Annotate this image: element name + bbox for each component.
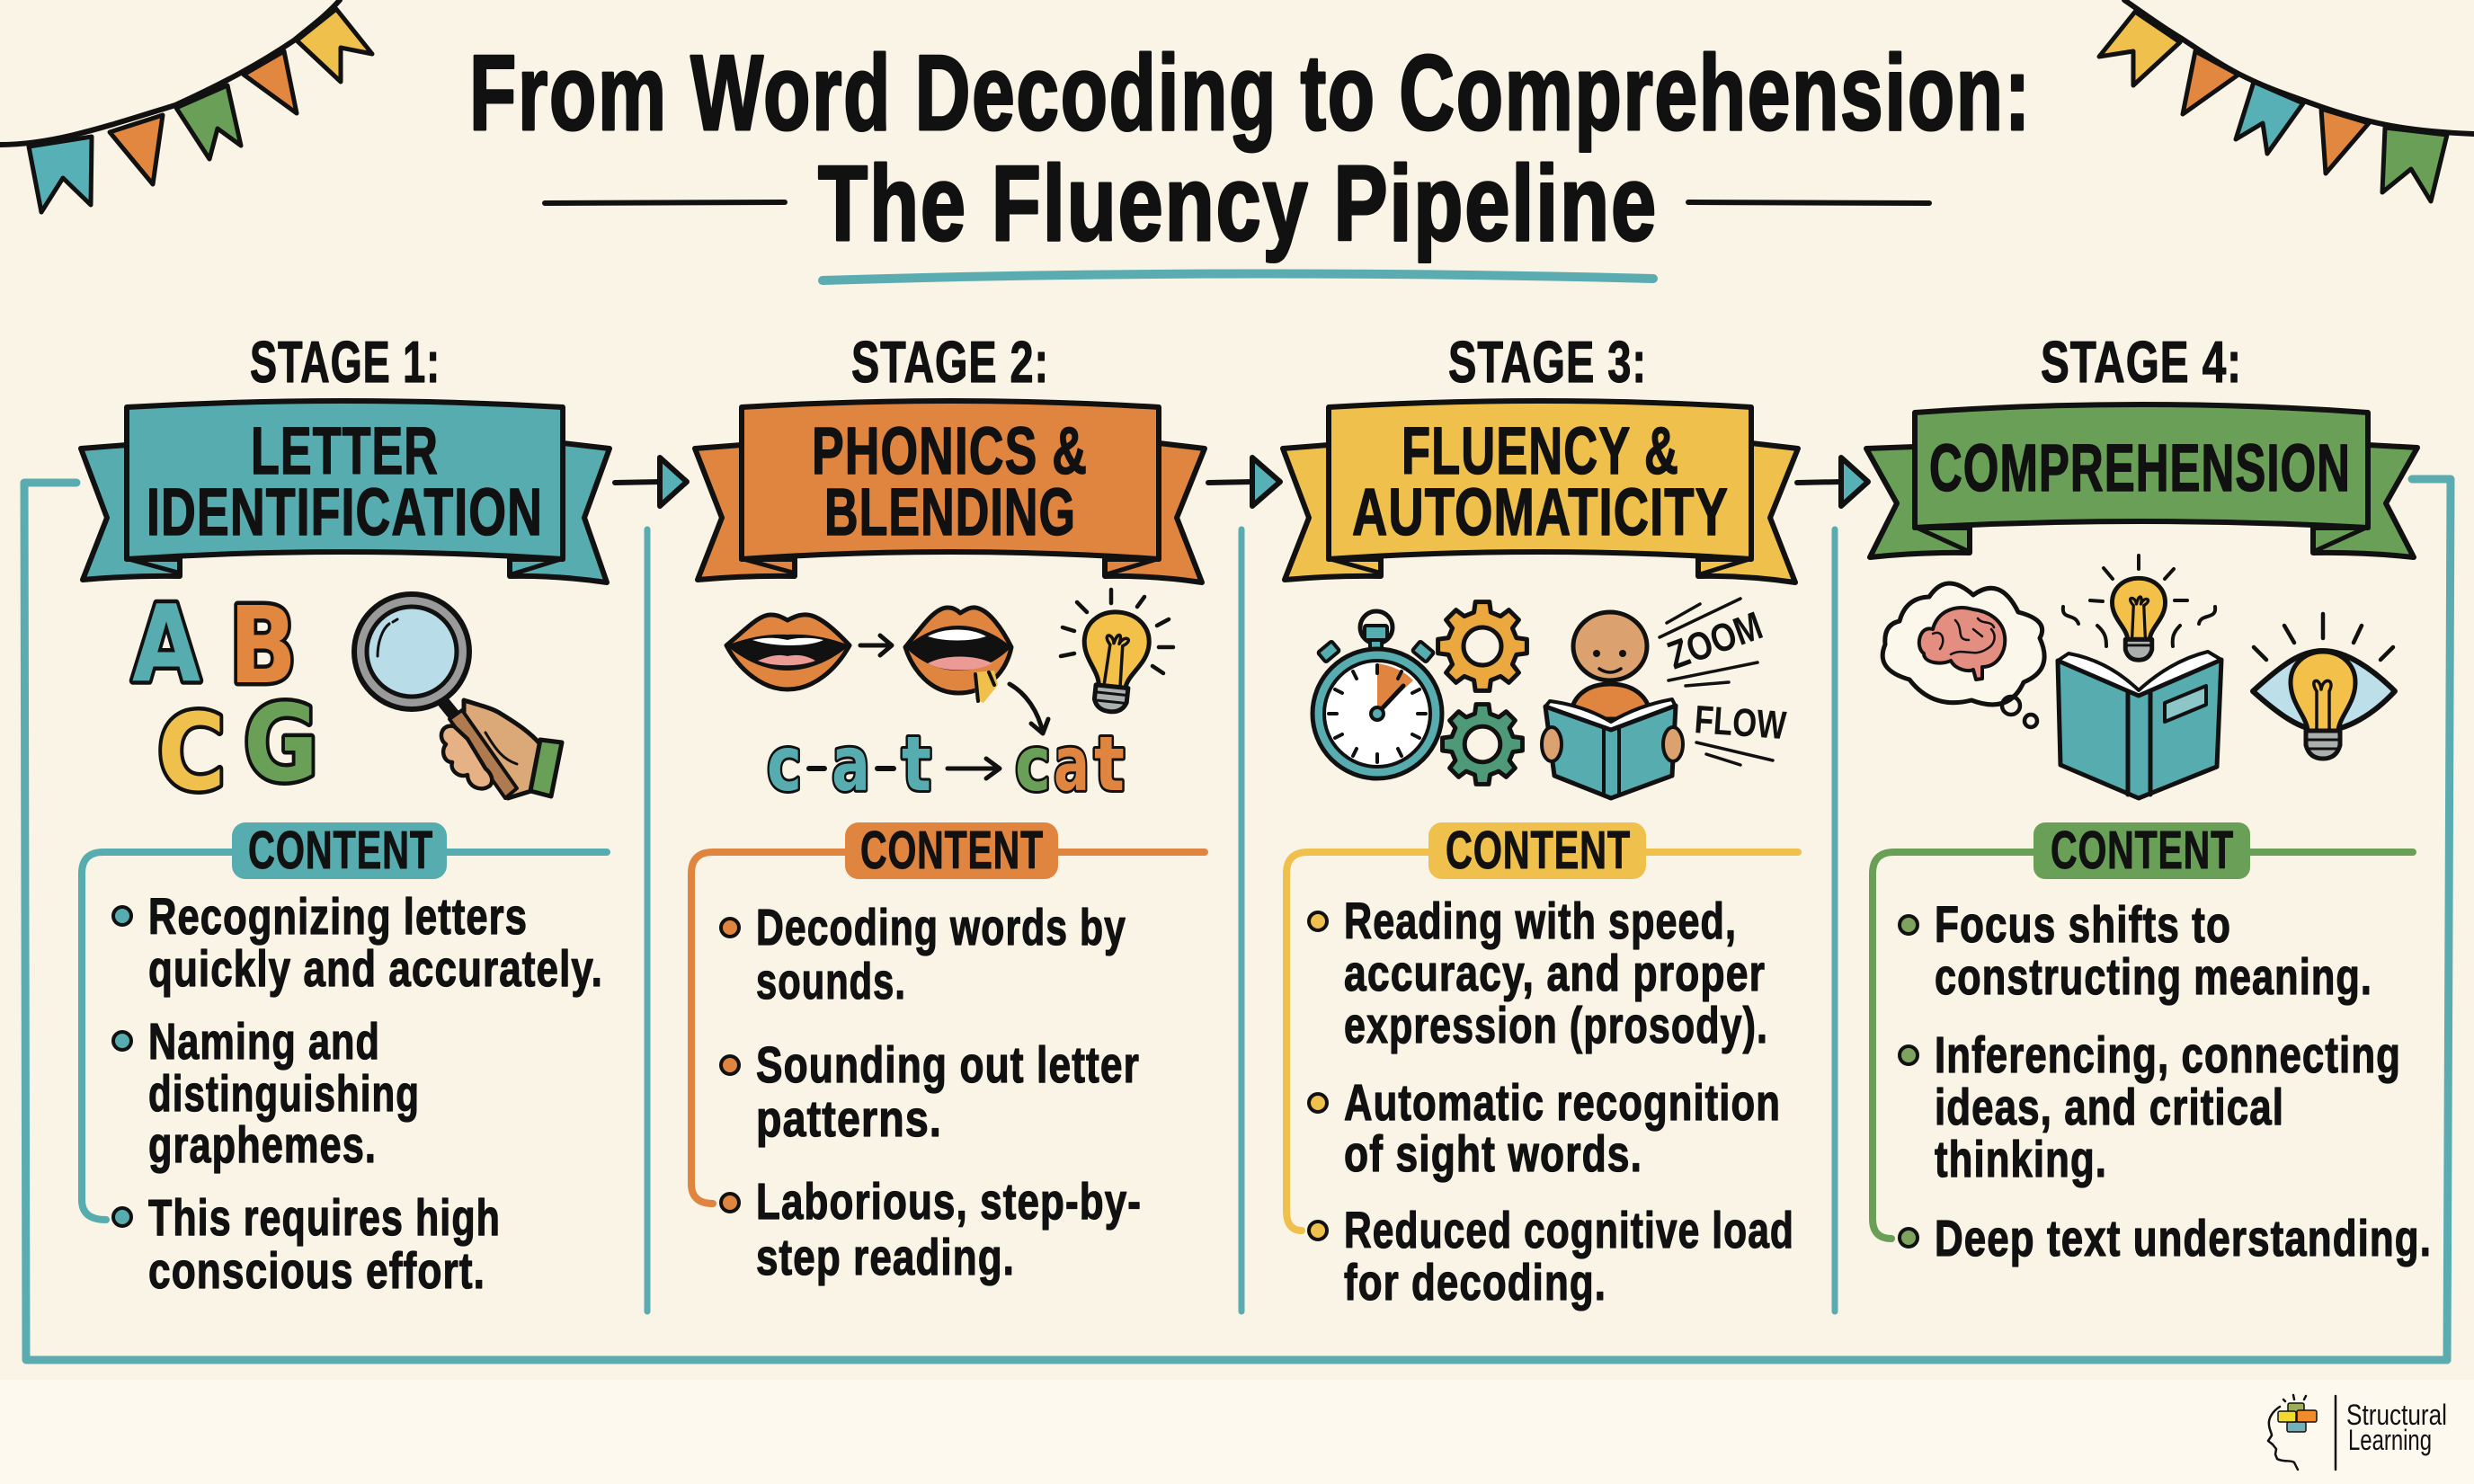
stage divider 2 bbox=[1239, 529, 1244, 1311]
content section bbox=[691, 821, 1205, 1285]
panel: stage 3 bbox=[1283, 329, 1798, 1311]
bullets list: step reading. bbox=[756, 1229, 1015, 1285]
logo: Structural Learning bbox=[2268, 1395, 2447, 1470]
stage 3 label: STAGE 3: bbox=[1448, 329, 1647, 395]
bullets list: Recognizing letters bbox=[148, 888, 528, 945]
stage 1 ribbon banner: IDENTIFICATION bbox=[147, 475, 543, 549]
arrow: stage 2 to 3 bbox=[1208, 458, 1280, 506]
stage 2 label: STAGE 2: bbox=[851, 329, 1049, 395]
content tag: CONTENT bbox=[2051, 821, 2234, 880]
word blend: c-a-t to cat: t bbox=[902, 720, 931, 808]
icon: light bulb bbox=[1061, 590, 1173, 715]
bullets list: ideas, and critical bbox=[1935, 1079, 2284, 1135]
content section bbox=[1873, 821, 2432, 1266]
icon: magnifying glass in hand bbox=[354, 594, 562, 798]
bullets list bbox=[721, 899, 1142, 1285]
stage divider 1 bbox=[644, 529, 651, 1311]
zoom label: ZOOM bbox=[1662, 603, 1768, 678]
arrow: stage 3 to 4 bbox=[1797, 458, 1868, 506]
bullets list: This requires high bbox=[148, 1189, 501, 1246]
icon: closed lips bbox=[726, 615, 850, 689]
stage 4 label: STAGE 4: bbox=[2041, 329, 2242, 395]
stage 3 ribbon banner: AUTOMATICITY bbox=[1352, 475, 1729, 549]
icon: brain in thought cloud bbox=[1882, 583, 2044, 727]
bullets list: Sounding out letter bbox=[756, 1036, 1140, 1093]
icon: open mouth bbox=[905, 608, 1011, 703]
arrow: mouth to word bbox=[1010, 684, 1048, 733]
bullets list: patterns. bbox=[756, 1090, 942, 1147]
icon: light bulb above book bbox=[2063, 555, 2215, 660]
bullets list: for decoding. bbox=[1344, 1254, 1606, 1311]
bunting: top right bbox=[2099, 0, 2474, 201]
bullets list: graphemes. bbox=[148, 1116, 377, 1173]
title bbox=[469, 33, 2032, 280]
icon: stopwatch bbox=[1313, 611, 1442, 778]
arrow: stage 1 to 2 bbox=[615, 458, 687, 506]
icon: coloured letters: A bbox=[132, 582, 200, 706]
content tag: CONTENT bbox=[1446, 821, 1631, 880]
icon: child reading bbox=[1542, 612, 1683, 798]
bullets list: of sight words. bbox=[1344, 1125, 1642, 1182]
title: The Fluency Pipeline bbox=[818, 144, 1658, 263]
bullets list: expression (prosody). bbox=[1344, 997, 1768, 1053]
bullets list: Naming and bbox=[148, 1013, 380, 1070]
stage divider 3 bbox=[1832, 529, 1838, 1311]
bullets list bbox=[1900, 896, 2432, 1266]
icon: coloured letters: B bbox=[229, 583, 297, 707]
icon: orange gear bbox=[1438, 602, 1526, 690]
bullets list: quickly and accurately. bbox=[148, 940, 603, 997]
bullets list: Reading with speed, bbox=[1344, 893, 1737, 949]
word blend: c-a-t to cat: a bbox=[1054, 720, 1090, 808]
pipeline frame bbox=[24, 479, 2451, 1360]
word blend: c-a-t to cat: a bbox=[832, 720, 870, 808]
panel: stage 2 bbox=[691, 329, 1205, 1285]
icon: open book bbox=[2058, 652, 2221, 798]
word blend: c-a-t to cat: c bbox=[767, 720, 802, 808]
stage 2 ribbon banner: BLENDING bbox=[824, 475, 1076, 549]
bunting: top left bbox=[0, 0, 372, 212]
bullets list: thinking. bbox=[1935, 1131, 2107, 1187]
word blend: c-a-t to cat: c bbox=[1015, 720, 1051, 808]
bullets list: sounds. bbox=[756, 953, 906, 1009]
icon: eye with bulb bbox=[2253, 614, 2395, 759]
stage 1 ribbon banner bbox=[81, 401, 610, 582]
logo: Structural Learning: Structural bbox=[2346, 1399, 2447, 1431]
stage 1 ribbon banner: LETTER bbox=[251, 413, 439, 488]
icon: coloured letters: C bbox=[157, 690, 226, 814]
icon: coloured letters bbox=[132, 582, 318, 814]
panel: stage 4 bbox=[1866, 329, 2432, 1266]
word blend: c-a-t to cat: t bbox=[1094, 720, 1125, 808]
stage 3 ribbon banner: FLUENCY & bbox=[1402, 413, 1679, 488]
bullets list: Decoding words by bbox=[756, 899, 1126, 955]
bullets list: conscious effort. bbox=[148, 1242, 485, 1299]
bullets list: Focus shifts to bbox=[1935, 896, 2231, 953]
content section bbox=[82, 821, 607, 1299]
word blend: c-a-t to cat bbox=[767, 720, 1125, 808]
content tag: CONTENT bbox=[860, 821, 1044, 880]
stage 3 ribbon banner bbox=[1283, 401, 1798, 582]
stage 4 ribbon banner bbox=[1866, 404, 2417, 557]
bullets list bbox=[113, 888, 603, 1299]
stage 2 ribbon banner bbox=[695, 401, 1205, 582]
bullets list: Laborious, step-by- bbox=[756, 1173, 1142, 1230]
bullets list: Automatic recognition bbox=[1344, 1074, 1781, 1131]
icon: green gear bbox=[1443, 705, 1522, 784]
arrow: lips to open mouth bbox=[860, 635, 892, 655]
stage 1 label: STAGE 1: bbox=[250, 329, 441, 395]
content section bbox=[1286, 821, 1798, 1311]
icon: coloured letters: G bbox=[244, 681, 318, 805]
stage 2 ribbon banner: PHONICS & bbox=[812, 413, 1088, 488]
logo: Structural Learning: Learning bbox=[2348, 1424, 2432, 1456]
bullets list: accuracy, and proper bbox=[1344, 945, 1766, 1001]
bullets list: Reduced cognitive load bbox=[1344, 1202, 1794, 1258]
panel: stage 1 bbox=[81, 329, 610, 1299]
bullets list bbox=[1309, 893, 1794, 1311]
flow label: FLOW bbox=[1693, 698, 1788, 748]
flow label bbox=[1693, 698, 1788, 765]
bullets list: distinguishing bbox=[148, 1065, 420, 1122]
content tag: CONTENT bbox=[248, 821, 433, 880]
